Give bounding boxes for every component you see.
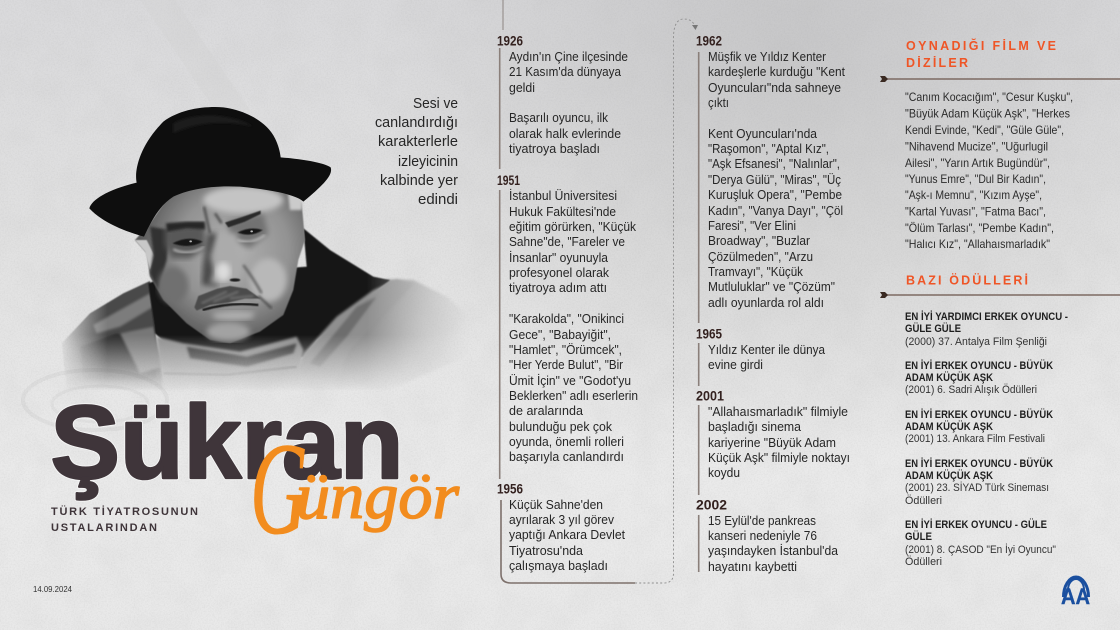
timeline 1965: evine girdi <box>708 357 763 372</box>
timeline 1951: de aralarında <box>509 403 584 418</box>
timeline 1951: İstanbul Üniversitesi <box>509 188 617 203</box>
timeline 1951: eğitim görürken, "Küçük <box>509 219 636 234</box>
brows <box>166 222 205 232</box>
film list: "Nihavend Mucize", "Uğurlugil <box>905 140 1048 154</box>
timeline 1951: bulunduğu pek çok <box>509 419 612 434</box>
timeline 1951: İnsanlar" oyunuyla <box>509 250 609 265</box>
film list: "Ölüm Tarlası", "Pembe Kadın", <box>905 221 1054 235</box>
award 3 <box>905 408 1053 445</box>
tagline quote: edindi <box>418 192 458 208</box>
award 4: ADAM KÜÇÜK AŞK <box>905 469 993 482</box>
film list: "Kartal Yuvası", "Fatma Bacı", <box>905 204 1046 218</box>
timeline 2001: Küçük Aşk" filmiyle noktayı <box>708 450 850 465</box>
eyes <box>173 239 203 246</box>
eye sockets <box>165 225 205 258</box>
timeline 1951: "Hamlet", "Örümcek", <box>509 342 622 357</box>
timeline 1962: Broadway", "Buzlar <box>708 233 811 248</box>
timeline 1926: Aydın'ın Çine ilçesinde <box>509 49 628 64</box>
title: Güngör: G <box>250 415 308 562</box>
mouth <box>203 304 258 310</box>
divider arrow: films <box>880 76 1120 82</box>
timeline 1962 <box>696 34 845 310</box>
award 2: ADAM KÜÇÜK AŞK <box>905 371 993 384</box>
timeline 1962: Çözülmeden", "Arzu <box>708 249 813 264</box>
timeline 1962: Oyuncuları"nda sahneye <box>708 80 841 95</box>
award 1: EN İYİ YARDIMCI ERKEK OYUNCU - <box>905 310 1068 323</box>
timeline 1962: Kadın", "Vanya Dayı", "Çöl <box>708 203 843 218</box>
subtitle: TÜRK TİYATROSUNUN <box>51 505 198 518</box>
timeline 1962: Mutluluklar" ve "Çözüm" <box>708 279 835 294</box>
timeline 2001: "Allahaısmarladık" filmiyle <box>708 404 848 419</box>
timeline 1951: oyunda, önemli rolleri <box>509 434 624 449</box>
tagline quote: kalbinde yer <box>380 173 458 189</box>
timeline 1951 <box>497 173 638 464</box>
divider arrow: awards <box>880 292 1120 298</box>
timeline 2002: hayatını kaybetti <box>708 559 797 574</box>
tagline quote: canlandırdığı <box>375 115 458 131</box>
timeline 1956 <box>497 482 625 573</box>
heading: films <box>906 38 1056 70</box>
heading: films: DİZİLER <box>906 55 968 70</box>
award 4 <box>905 457 1053 507</box>
date: 14.09.2024 <box>33 585 73 594</box>
timeline 2002: 15 Eylül'de pankreas <box>708 513 816 528</box>
award 5: EN İYİ ERKEK OYUNCU - GÜLE <box>905 518 1047 531</box>
timeline 1951: Ümit İçin" ve "Godot'yu <box>509 373 631 388</box>
timeline 1951: Gece", "Babayiğit", <box>509 327 611 342</box>
timeline 1951: "Her Yerde Bulut", "Bir <box>509 357 624 372</box>
film list: Kendi Evinde, "Kedi", "Güle Güle", <box>905 123 1064 137</box>
timeline 1965: 1965 <box>696 326 722 342</box>
subtitle <box>51 505 198 534</box>
tagline quote: Sesi ve <box>413 96 458 112</box>
title: Güngör <box>250 415 459 562</box>
temple and hair <box>135 240 155 270</box>
film list <box>905 90 1073 251</box>
timeline 1951: Hukuk Fakültesi'nde <box>509 204 616 219</box>
award 3: ADAM KÜÇÜK AŞK <box>905 420 993 433</box>
award 5: GÜLE <box>905 530 932 543</box>
timeline 1956: Küçük Sahne'den <box>509 497 603 512</box>
timeline 1962: adlı oyunlarda rol aldı <box>708 295 824 310</box>
timeline 2001: kariyerine "Büyük Adam <box>708 435 836 450</box>
timeline 1951: Sahne"de, "Fareler ve <box>509 234 625 249</box>
dark scarf behind chin <box>148 228 390 367</box>
timeline 1926: olarak halk evlerinde <box>509 126 621 141</box>
tagline quote: izleyicinin <box>398 154 458 170</box>
award 4: Ödülleri <box>905 495 942 507</box>
timeline 2001: koydu <box>708 465 740 480</box>
award 5: Ödülleri <box>905 556 942 568</box>
timeline 1962: çıktı <box>708 95 729 110</box>
award 4: EN İYİ ERKEK OYUNCU - BÜYÜK <box>905 457 1053 470</box>
award 2: EN İYİ ERKEK OYUNCU - BÜYÜK <box>905 359 1053 372</box>
timeline 1956: Tiyatrosu'nda <box>509 543 584 558</box>
timeline 1962: Faresi", "Ver Elini <box>708 218 796 233</box>
timeline 1962: Müşfik ve Yıldız Kenter <box>708 49 827 64</box>
timeline 1956: ayrılarak 3 yıl görev <box>509 512 614 527</box>
timeline 1951: profesyonel olarak <box>509 265 609 280</box>
film list: "Halıcı Kız", "Allahaısmarladık" <box>905 237 1050 251</box>
tagline quote <box>375 96 458 208</box>
film list: "Canım Kocacığım", "Cesur Kuşku", <box>905 90 1073 104</box>
heading: awards: BAZI ÖDÜLLERİ <box>906 272 1028 288</box>
timeline connector lines <box>500 0 699 583</box>
film list: "Yunus Emre", "Dul Bir Kadın", <box>905 172 1046 186</box>
timeline 1962: kardeşlerle kurduğu "Kent <box>708 64 845 79</box>
moustache <box>194 286 261 311</box>
under eye folds <box>173 247 205 252</box>
timeline 2002: yaşındayken İstanbul'da <box>708 543 839 558</box>
frown lines <box>204 207 222 233</box>
timeline 1962: "Derya Gülü", "Miras", "Üç <box>708 172 841 187</box>
award 1: (2000) 37. Antalya Film Şenliği <box>905 336 1047 348</box>
timeline 1951: tiyatroya adım attı <box>509 280 607 295</box>
title: Güngör: üngör <box>296 460 459 533</box>
timeline 2002: 2002 <box>696 498 727 512</box>
award 1 <box>905 310 1068 348</box>
light collar band <box>298 278 402 387</box>
right shoulder <box>336 278 454 387</box>
timeline 1951: 1951 <box>497 173 520 188</box>
award 2 <box>905 359 1053 396</box>
timeline 2002 <box>696 498 839 574</box>
nose <box>202 233 218 287</box>
face <box>135 180 305 343</box>
portrait photo <box>62 107 480 390</box>
icon: AA logo: AA <box>1061 584 1090 609</box>
timeline 1926: tiyatroya başladı <box>509 141 600 156</box>
timeline 1962: Tramvayı", "Küçük <box>708 264 803 279</box>
timeline 1926: geldi <box>509 80 535 95</box>
timeline 1962: 1962 <box>696 34 722 48</box>
subtitle: USTALARINDAN <box>51 522 157 534</box>
film list: Ailesi", "Yarın Artık Bugündür", <box>905 156 1050 170</box>
clothing, fading into the page <box>62 228 480 390</box>
timeline 1962: Kuruşluk Opera", "Pembe <box>708 187 842 202</box>
left jacket <box>62 281 167 390</box>
timeline 1962: Kent Oyuncuları'nda <box>708 126 818 141</box>
award 4: (2001) 23. SİYAD Türk Sineması <box>905 481 1049 494</box>
timeline 1965 <box>696 326 826 372</box>
film list: "Büyük Adam Küçük Aşk", "Herkes <box>905 106 1070 120</box>
chin <box>207 322 250 341</box>
timeline 2001: başladığı sinema <box>708 419 802 434</box>
title: Şükran: Şükran <box>50 385 404 501</box>
award 5: (2001) 8. ÇASOD "En İyi Oyuncu" <box>905 543 1056 556</box>
timeline 1962: "Aşk Efsanesi", "Nalınlar", <box>708 156 840 171</box>
forehead highlight <box>203 187 283 213</box>
timeline 1951: Beklerken" adlı eserlerin <box>509 388 638 403</box>
timeline 1926: 1926 <box>497 34 523 48</box>
award 5 <box>905 518 1056 568</box>
timeline 1962: "Raşomon", "Aptal Kız", <box>708 141 829 156</box>
right cheek <box>250 258 287 302</box>
film list: "Aşk-ı Memnu", "Kızım Ayşe", <box>905 188 1042 202</box>
award 2: (2001) 6. Sadri Alışık Ödülleri <box>905 384 1037 396</box>
timeline 1926: Başarılı oyuncu, ilk <box>509 110 608 125</box>
timeline 1956: 1956 <box>497 482 523 496</box>
timeline 2001 <box>696 388 850 480</box>
timeline 1965: Yıldız Kenter ile dünya <box>708 342 826 357</box>
timeline 2002: kanseri nedeniyle 76 <box>708 528 817 543</box>
timeline 1951: "Karakolda", "Onikinci <box>509 311 624 326</box>
hat <box>89 107 331 237</box>
award 3: EN İYİ ERKEK OYUNCU - BÜYÜK <box>905 408 1053 421</box>
timeline 1956: çalışmaya başladı <box>509 558 608 573</box>
timeline 1951: başarıyla canlandırdı <box>509 449 624 464</box>
heading: films: OYNADIĞI FİLM VE <box>906 38 1056 53</box>
timeline 1956: yaptığı Ankara Devlet <box>509 527 625 542</box>
title: Şükran: Şükran <box>50 385 404 501</box>
timeline 2001: 2001 <box>696 388 724 404</box>
striped scarf and sweater <box>157 337 303 390</box>
timeline 1926: 21 Kasım'da dünyaya <box>509 64 622 79</box>
timeline 1926 <box>497 34 628 156</box>
tagline quote: karakterlerle <box>378 134 458 150</box>
award 3: (2001) 13. Ankara Film Festivali <box>905 433 1045 445</box>
award 1: GÜLE GÜLE <box>905 322 961 335</box>
